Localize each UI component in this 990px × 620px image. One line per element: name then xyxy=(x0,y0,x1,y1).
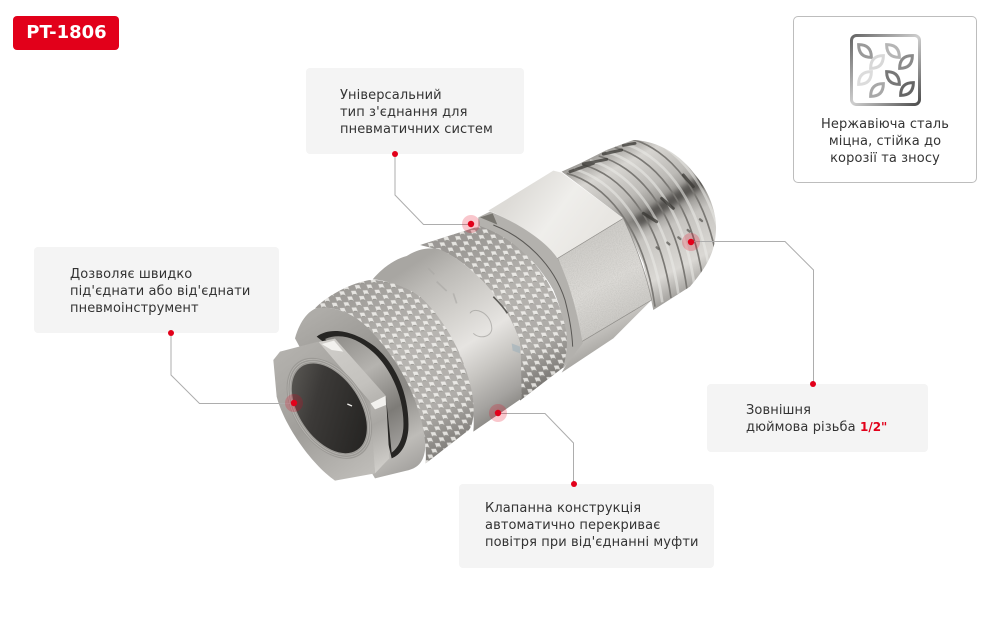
callout: universal connection type xyxy=(306,68,524,154)
lower body under hex xyxy=(562,300,652,373)
threaded rim xyxy=(269,342,390,475)
front flange xyxy=(295,307,426,478)
hotspot: quick connect xyxy=(285,394,303,412)
callout: quick connect: Дозволяє швидко xyxy=(70,267,192,282)
hex nut top face xyxy=(488,171,623,258)
dark gap behind front nut xyxy=(317,331,408,458)
text: stainless steel description xyxy=(821,117,949,166)
callout: quick connect: під'єднати або від'єднати xyxy=(70,284,250,299)
hex nut front face xyxy=(558,218,652,342)
leader: valve xyxy=(498,414,574,484)
text: stainless steel description: міцна, стійка до xyxy=(829,134,941,149)
leader: universal connection xyxy=(395,154,471,224)
callout: valve design: Клапанна конструкція xyxy=(485,501,641,516)
ring shadow xyxy=(493,225,573,347)
smooth middle collar xyxy=(373,248,522,432)
threaded end xyxy=(562,140,716,310)
callout: external thread xyxy=(707,384,928,452)
badge: product code xyxy=(13,16,119,50)
leader: quick connect xyxy=(171,333,293,404)
icon: stainless steel leaves xyxy=(852,36,920,104)
callout: valve design: повітря при від'єднанні муфти xyxy=(485,535,699,550)
rim thread lines xyxy=(271,344,388,472)
text: stainless steel description: Нержавіюча сталь xyxy=(821,117,949,132)
callout: universal connection type: тип з'єднання для xyxy=(340,105,468,120)
chamfer shadow xyxy=(480,213,497,225)
callout: universal connection type: пневматичних систем xyxy=(340,122,493,137)
inner shoulder xyxy=(325,336,403,453)
rear polished ring xyxy=(478,212,583,368)
hotspot: universal connection xyxy=(462,215,480,233)
bore xyxy=(276,350,382,467)
badge: product code: PT-1806 xyxy=(26,22,107,43)
text: stainless steel description: корозії та зносу xyxy=(830,151,940,166)
front hex side xyxy=(318,339,389,473)
bore glint xyxy=(347,404,352,406)
front hex highlights xyxy=(322,341,386,409)
callout: quick connect: пневмоінструмент xyxy=(70,301,199,316)
callout: external thread: Зовнішня xyxy=(746,403,811,418)
callout: external thread: дюймова різьба 1/2" xyxy=(746,420,887,435)
front hex face xyxy=(273,342,375,481)
callout: quick connect xyxy=(34,247,279,333)
product photo: pneumatic quick coupling xyxy=(269,130,735,481)
rear knurled sleeve xyxy=(420,226,567,401)
leader: thread xyxy=(690,242,814,384)
front knurled sleeve xyxy=(315,280,474,463)
hotspot: thread xyxy=(682,233,700,251)
callout: valve design: автоматично перекриває xyxy=(485,518,660,533)
hotspot: valve xyxy=(489,404,507,422)
callout: universal connection type: Універсальний xyxy=(340,88,442,103)
panel: stainless steel xyxy=(793,16,977,183)
leader end dots xyxy=(168,151,816,487)
callout: valve design xyxy=(459,484,714,568)
